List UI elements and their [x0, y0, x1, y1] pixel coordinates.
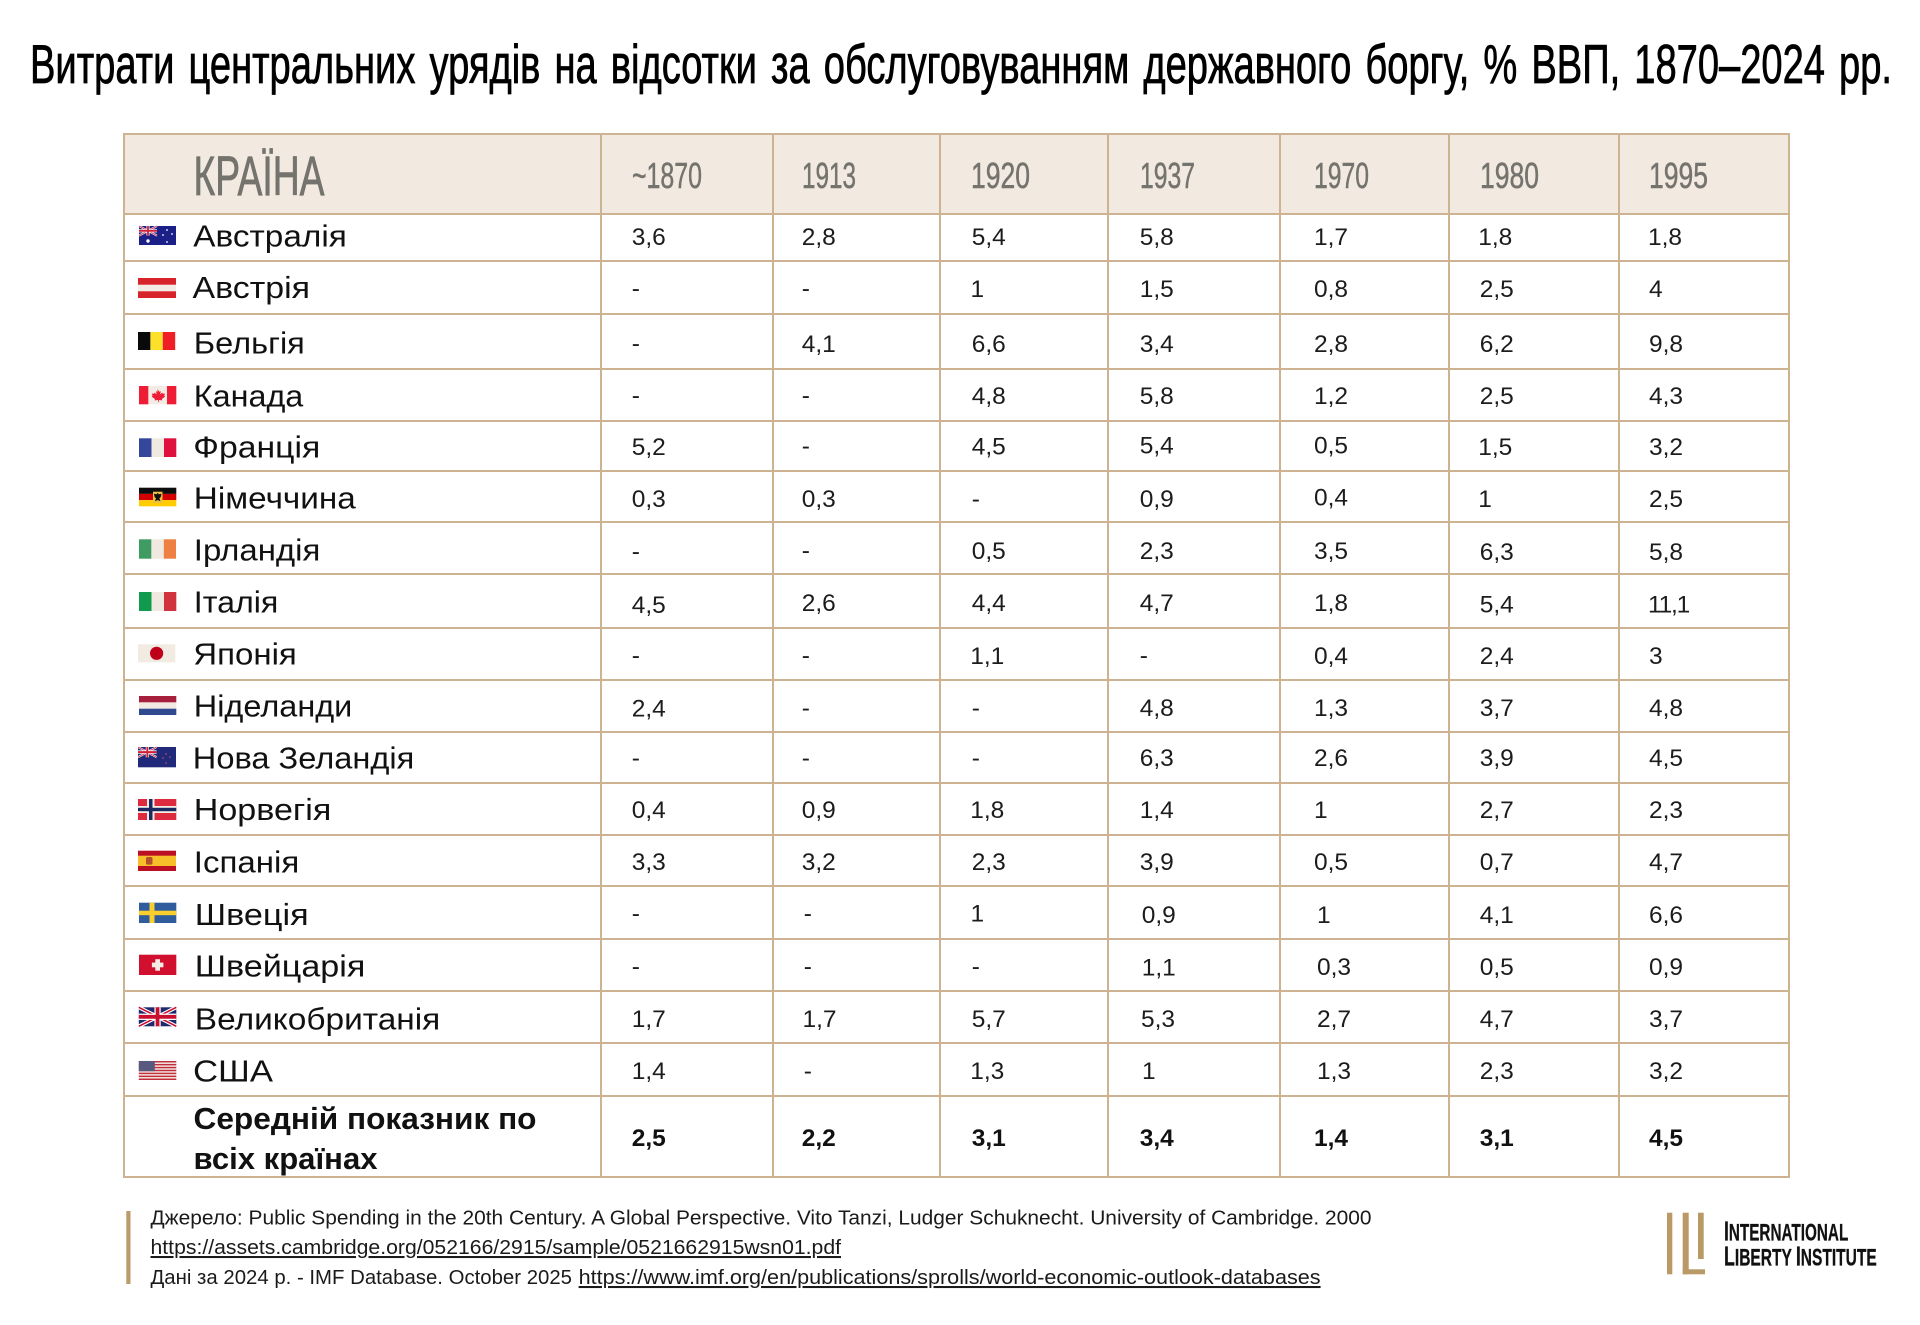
- row: average: [194, 1101, 1683, 1176]
- values: 4,5: [632, 592, 666, 619]
- values: -: [802, 538, 810, 565]
- source note: Дані за 2024 р. - IMF Database. October 2025: [150, 1266, 572, 1289]
- values: 2,8: [1314, 331, 1348, 358]
- values: -: [632, 745, 640, 772]
- values: 6,6: [1649, 902, 1683, 929]
- country name: Ірландія: [194, 533, 320, 568]
- table: [123, 133, 1790, 1178]
- values: 4,3: [1649, 383, 1683, 410]
- flag: Switzerland: [139, 955, 176, 975]
- values: -: [632, 383, 640, 410]
- values: -: [802, 275, 810, 302]
- values: 4,8: [972, 383, 1006, 410]
- country name: Великобританія: [195, 1001, 440, 1036]
- header: years: 1937: [1140, 155, 1195, 196]
- header: years: 1970: [1314, 155, 1369, 196]
- header: years: 1920: [971, 155, 1030, 196]
- values: 0,4: [632, 797, 666, 824]
- values: 2,5: [1480, 276, 1514, 303]
- country name: Швейцарія: [195, 949, 365, 984]
- flag: Italy: [139, 592, 176, 611]
- values: 0,3: [632, 486, 666, 513]
- values: 3,6: [632, 224, 666, 251]
- row: Німеччина: [139, 480, 1683, 515]
- flag: New Zealand: [138, 747, 176, 767]
- values: [632, 433, 1683, 461]
- values: 0,5: [1314, 849, 1348, 876]
- values: -: [972, 486, 980, 513]
- values: [632, 383, 1683, 410]
- source note: Джерело: Public Spending in the 20th Century. A Global Perspective. Vito Tanzi, Ludger Schuknecht. University of Cambridge. 2000: [150, 1206, 1372, 1230]
- values: 1,3: [970, 1058, 1004, 1085]
- values: 0,5: [1314, 433, 1348, 460]
- values: 2,6: [802, 590, 836, 617]
- header: years: ~1870: [632, 155, 702, 196]
- values: 4,1: [1480, 902, 1514, 929]
- values: 1: [970, 276, 984, 303]
- flag: United States: [139, 1061, 176, 1080]
- row: Канада: [139, 379, 1683, 414]
- row: Швеція: [139, 897, 1683, 932]
- row: Норвегія: [138, 792, 1683, 827]
- values: 5,8: [1140, 383, 1174, 410]
- values: -: [802, 745, 810, 772]
- values: -: [632, 331, 640, 358]
- values: 1,7: [802, 1006, 837, 1033]
- source note: https://www.imf.org/en/publications/sprolls/world-economic-outlook-databases: [579, 1266, 1321, 1289]
- values: 6,2: [1480, 331, 1514, 358]
- table header row: [194, 144, 1708, 207]
- table header background: [124, 134, 1789, 214]
- values: [632, 797, 1683, 824]
- average label: всіх країнах: [194, 1141, 378, 1176]
- header: years: 1980: [1480, 155, 1539, 196]
- flag: Australia: [139, 226, 176, 245]
- values: 5,4: [1140, 433, 1174, 460]
- values: 3,4: [1140, 331, 1174, 358]
- header: years: 1913: [802, 155, 856, 196]
- values: 1,4: [1140, 797, 1174, 824]
- country name: США: [193, 1054, 273, 1089]
- values: -: [802, 383, 810, 410]
- values: 2,7: [1317, 1006, 1351, 1033]
- flag: Spain: [138, 851, 176, 871]
- values: 4,1: [802, 331, 836, 358]
- average values: 3,4: [1140, 1125, 1174, 1152]
- flag: United Kingdom: [139, 1007, 176, 1026]
- values: [632, 849, 1683, 876]
- values: 4,8: [1649, 695, 1683, 722]
- row: Бельгія: [138, 325, 1683, 360]
- values: 5,3: [1141, 1006, 1175, 1033]
- source accent bar: [126, 1211, 130, 1284]
- flag: Netherlands: [139, 696, 176, 715]
- values: [632, 275, 1663, 303]
- values: [632, 1058, 1683, 1085]
- row: Італія: [139, 585, 1690, 620]
- values: 3,3: [632, 849, 666, 876]
- average values: 3,1: [1480, 1125, 1514, 1152]
- values: 9,8: [1649, 331, 1683, 358]
- values: 5,4: [972, 224, 1006, 251]
- values: 3,2: [1649, 434, 1683, 461]
- values: -: [632, 539, 640, 566]
- values: 4,8: [1140, 695, 1174, 722]
- source note: https://assets.cambridge.org/052166/2915/sample/0521662915wsn01.pdf: [150, 1236, 841, 1259]
- average values: 2,5: [632, 1125, 666, 1152]
- row: Нова Зеландія: [138, 740, 1683, 775]
- values: 2,3: [1140, 538, 1174, 565]
- values: 6,6: [972, 331, 1006, 358]
- row: Австрія: [138, 270, 1663, 305]
- values: 1,2: [1314, 383, 1348, 410]
- values: -: [804, 901, 812, 928]
- values: -: [632, 954, 640, 981]
- country name: Канада: [194, 379, 304, 414]
- values: 4,4: [972, 590, 1006, 617]
- values: 1,1: [970, 643, 1004, 670]
- values: 0,9: [1140, 486, 1174, 513]
- values: 4,7: [1649, 849, 1683, 876]
- values: 3,7: [1649, 1006, 1683, 1033]
- row: Австралія: [139, 219, 1682, 254]
- values: 1: [1478, 486, 1492, 513]
- values: -: [972, 745, 980, 772]
- values: -: [802, 695, 810, 722]
- values: [632, 485, 1683, 513]
- average label: [194, 1101, 536, 1176]
- values: -: [802, 643, 810, 670]
- average values: 1,4: [1314, 1125, 1348, 1152]
- values: 3,9: [1140, 849, 1174, 876]
- values: 5,8: [1649, 539, 1683, 566]
- average values: [632, 1125, 1683, 1152]
- header: years: 1995: [1649, 155, 1708, 196]
- values: 5,2: [632, 434, 666, 461]
- row: Великобританія: [139, 1001, 1683, 1036]
- values: 0,9: [1649, 954, 1683, 981]
- average values: 4,5: [1649, 1125, 1683, 1152]
- row: Японія: [138, 636, 1663, 671]
- logo mark: [1667, 1213, 1705, 1274]
- header: country: КРАЇНА: [194, 144, 325, 207]
- values: -: [972, 954, 980, 981]
- values: 1,8: [1648, 224, 1682, 251]
- country name: Франція: [193, 429, 320, 464]
- values: -: [632, 901, 640, 928]
- values: 2,3: [1480, 1058, 1514, 1085]
- values: 4,5: [1649, 745, 1683, 772]
- values: [632, 590, 1690, 619]
- flag: Norway: [138, 799, 176, 820]
- values: 3,2: [802, 849, 836, 876]
- values: 0,3: [1317, 954, 1351, 981]
- values: [632, 745, 1683, 772]
- values: 5,7: [972, 1006, 1006, 1033]
- flag: Germany: [139, 488, 176, 506]
- row: Ірландія: [139, 533, 1683, 568]
- values: [632, 1006, 1683, 1033]
- row: Швейцарія: [139, 949, 1683, 984]
- values: 1,5: [1478, 434, 1512, 461]
- values: 2,6: [1314, 745, 1348, 772]
- values: 3,9: [1480, 745, 1514, 772]
- values: 3,2: [1649, 1058, 1683, 1085]
- values: 1: [1317, 902, 1331, 929]
- values: 1,8: [1478, 224, 1512, 251]
- flag: Belgium: [138, 332, 175, 350]
- row: Ніделанди: [139, 689, 1683, 724]
- values: 0,4: [1314, 643, 1348, 670]
- values: 2,5: [1480, 383, 1514, 410]
- row: США: [139, 1054, 1683, 1089]
- values: 1,7: [632, 1006, 666, 1033]
- values: 3,7: [1480, 695, 1514, 722]
- values: 2,3: [972, 849, 1006, 876]
- flag: Ireland: [139, 539, 176, 559]
- source note: [150, 1206, 1372, 1289]
- values: -: [632, 643, 640, 670]
- values: -: [972, 695, 980, 722]
- values: 1,1: [1142, 955, 1176, 982]
- header: years: [632, 155, 1708, 196]
- values: 2,7: [1480, 797, 1514, 824]
- values: 1: [1142, 1058, 1156, 1085]
- values: 3,5: [1314, 538, 1348, 565]
- average values: 2,2: [802, 1125, 836, 1152]
- values: 3: [1649, 643, 1663, 670]
- values: 11,1: [1648, 592, 1690, 619]
- row: Франція: [139, 429, 1683, 464]
- values: [632, 954, 1683, 982]
- values: -: [1140, 643, 1148, 670]
- country name: Австрія: [192, 270, 310, 305]
- values: 5,8: [1140, 224, 1174, 251]
- values: -: [632, 275, 640, 302]
- logo wordmark: [1724, 1216, 1877, 1272]
- country name: Японія: [193, 636, 297, 671]
- values: 0,8: [1314, 276, 1348, 303]
- values: -: [802, 433, 810, 460]
- values: 4,7: [1480, 1006, 1514, 1033]
- values: [632, 695, 1683, 723]
- values: 1,7: [1314, 224, 1348, 251]
- average values: 3,1: [972, 1125, 1006, 1152]
- logo wordmark: INTERNATIONAL: [1724, 1216, 1848, 1247]
- values: 4,7: [1140, 590, 1174, 617]
- flag: France: [139, 438, 176, 457]
- values: 2,8: [802, 224, 836, 251]
- flag: Austria: [138, 278, 176, 298]
- country name: Австралія: [193, 219, 347, 254]
- values: 4: [1649, 276, 1663, 303]
- country name: Бельгія: [194, 325, 305, 360]
- country name: Нова Зеландія: [193, 740, 414, 775]
- values: 0,7: [1480, 849, 1514, 876]
- logo wordmark: LIBERTY INSTITUTE: [1724, 1241, 1877, 1272]
- values: 1,5: [1140, 276, 1174, 303]
- values: 1,8: [1314, 590, 1348, 617]
- values: 2,4: [1480, 643, 1514, 670]
- flag: Sweden: [139, 903, 176, 923]
- logo: International Liberty Institute: [1667, 1213, 1877, 1274]
- values: [632, 331, 1683, 358]
- values: [632, 538, 1683, 566]
- country name: Німеччина: [194, 480, 357, 515]
- country name: Італія: [194, 585, 278, 620]
- values: 0,5: [1480, 954, 1514, 981]
- values: 5,4: [1480, 592, 1514, 619]
- values: 0,4: [1314, 485, 1348, 512]
- values: 1,8: [970, 797, 1004, 824]
- country name: Норвегія: [194, 792, 331, 827]
- values: 6,3: [1140, 745, 1174, 772]
- values: 1,4: [632, 1058, 666, 1085]
- country name: Ніделанди: [194, 689, 352, 724]
- values: 2,5: [1649, 486, 1683, 513]
- values: 0,9: [1142, 902, 1176, 929]
- values: [632, 901, 1683, 929]
- values: 1: [970, 901, 984, 928]
- values: -: [804, 1058, 812, 1085]
- values: 2,3: [1649, 797, 1683, 824]
- values: [632, 643, 1663, 670]
- values: 4,5: [972, 433, 1006, 460]
- values: [632, 224, 1682, 251]
- flag: Canada: [139, 386, 176, 404]
- row: Іспанія: [138, 844, 1683, 879]
- flag: Japan: [138, 644, 175, 662]
- values: 6,3: [1480, 539, 1514, 566]
- values: 1,3: [1314, 695, 1348, 722]
- average label: Середній показник по: [194, 1101, 536, 1136]
- country name: Швеція: [195, 897, 309, 932]
- values: 0,9: [802, 797, 836, 824]
- country name: Іспанія: [194, 844, 299, 879]
- values: 2,4: [632, 696, 666, 723]
- values: -: [804, 954, 812, 981]
- values: 0,3: [802, 486, 836, 513]
- values: 1,3: [1317, 1058, 1351, 1085]
- values: 1: [1314, 797, 1328, 824]
- values: 0,5: [972, 538, 1006, 565]
